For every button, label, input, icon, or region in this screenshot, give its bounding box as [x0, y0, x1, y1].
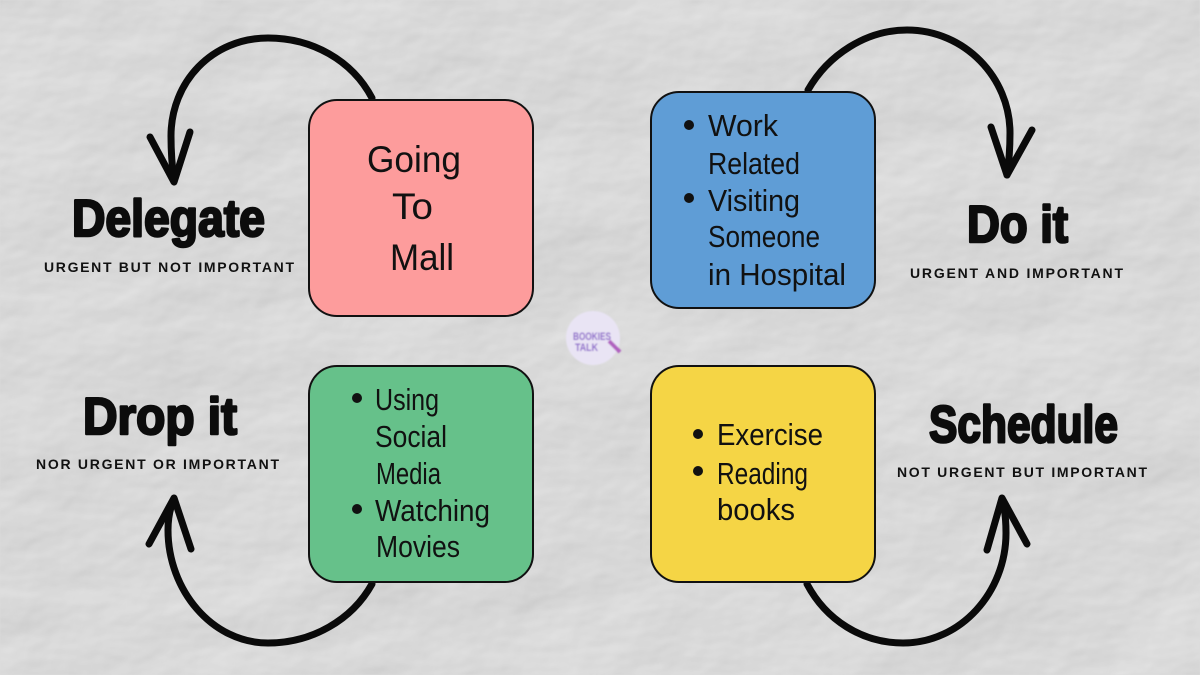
- arrow: box to schedule: [807, 498, 1027, 643]
- card text: work and hospital: Someone: [708, 219, 820, 254]
- panel: delegate: [44, 38, 533, 316]
- card text: going to mall: Going: [367, 139, 461, 180]
- arrow: box to delegate: [150, 38, 372, 182]
- card text: going to mall: Mall: [390, 237, 454, 278]
- card text: social media and movies: Watching: [375, 493, 490, 528]
- card text: work and hospital: in Hospital: [708, 257, 846, 292]
- card text: going to mall: [367, 139, 461, 278]
- label: nor urgent or important: NOR URGENT OR IMPORTANT: [36, 456, 279, 472]
- card: yellow: [651, 366, 875, 582]
- card text: social media and movies: Social: [375, 419, 447, 454]
- label: not urgent but important: NOT URGENT BUT IMPORTANT: [897, 464, 1147, 480]
- card text: work and hospital: Work: [708, 108, 778, 143]
- card text: work and hospital: Related: [708, 146, 800, 181]
- heading: delegate: Delegate: [72, 190, 265, 248]
- card: green: [309, 366, 533, 582]
- logo: bookies talk: BOOKIES: [573, 331, 611, 343]
- card text: social media and movies: [352, 382, 490, 564]
- card text: exercise and reading: Exercise: [717, 417, 823, 452]
- panel: drop it: [36, 366, 533, 643]
- logo: bookies talk: TALK: [575, 342, 598, 354]
- card text: work and hospital: Visiting: [708, 183, 800, 218]
- card text: exercise and reading: books: [717, 492, 795, 527]
- heading: schedule: Schedule: [929, 396, 1118, 454]
- card text: work and hospital: [684, 108, 846, 292]
- logo: bookies talk: [566, 311, 620, 365]
- card text: social media and movies: Using: [375, 382, 439, 417]
- heading: do it: Do it: [967, 196, 1068, 254]
- card text: exercise and reading: [693, 417, 823, 527]
- label: urgent but not important: URGENT BUT NOT IMPORTANT: [44, 259, 294, 275]
- card text: social media and movies: Media: [376, 456, 442, 491]
- arrow: box to drop it: [149, 498, 372, 643]
- arrow: box to do it: [808, 30, 1032, 175]
- card text: going to mall: To: [392, 186, 433, 227]
- panel: do it: [651, 30, 1123, 308]
- heading: drop it: Drop it: [83, 388, 237, 446]
- card: blue: [651, 92, 875, 308]
- card text: exercise and reading: Reading: [717, 456, 808, 491]
- card: pink: [309, 100, 533, 316]
- label: urgent and important: URGENT AND IMPORTANT: [910, 265, 1123, 281]
- panel: schedule: [651, 366, 1147, 643]
- card text: social media and movies: Movies: [376, 529, 460, 564]
